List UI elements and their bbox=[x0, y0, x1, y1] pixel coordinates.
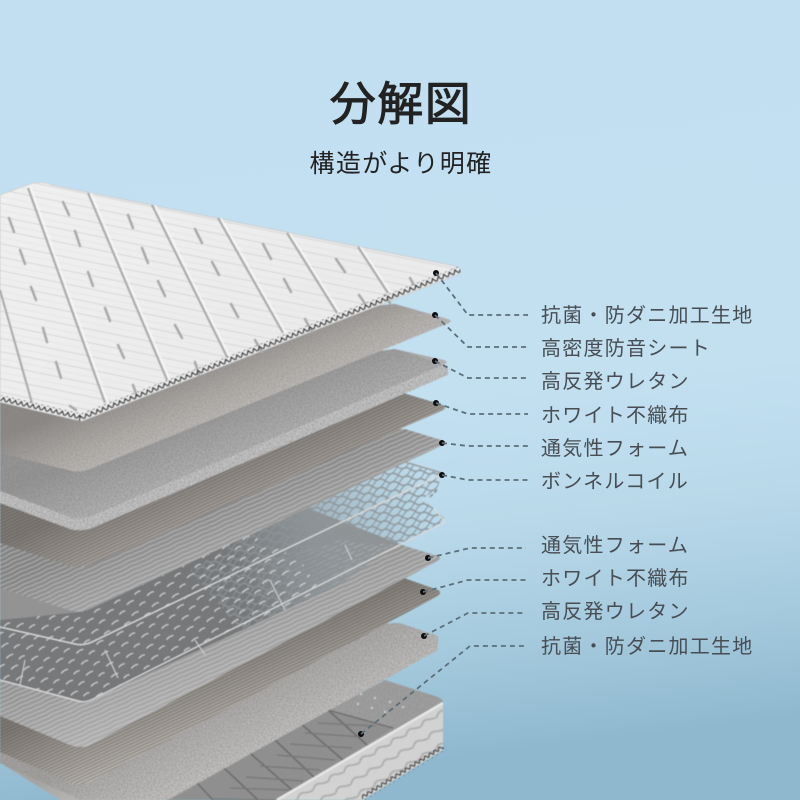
callout: 高反発ウレタン (lower): 高反発ウレタン bbox=[541, 600, 690, 623]
callout: ボンネルコイル: ボンネルコイル bbox=[541, 470, 689, 493]
callout: 抗菌・防ダニ加工生地 (top): 抗菌・防ダニ加工生地 bbox=[541, 304, 754, 327]
callout: 高密度防音シート bbox=[432, 312, 711, 360]
callout: ホワイト不織布 (lower) bbox=[420, 567, 690, 595]
layer 2 high-density soundproof sheet bbox=[0, 304, 451, 472]
callout: 通気性フォーム (lower) bbox=[425, 534, 689, 561]
callout: 通気性フォーム (lower): 通気性フォーム bbox=[541, 534, 689, 557]
callout: 抗菌・防ダニ加工生地 (bottom) bbox=[358, 635, 754, 737]
layer 1 quilted top fabric bbox=[0, 182, 461, 421]
title: 分解図 bbox=[330, 78, 472, 130]
bonnell coil bbox=[0, 462, 446, 702]
callout: 抗菌・防ダニ加工生地 (bottom): 抗菌・防ダニ加工生地 bbox=[541, 635, 754, 658]
layer 8: lower breathable foam bbox=[0, 470, 440, 747]
base mattress bbox=[160, 680, 445, 800]
callout: ボンネルコイル bbox=[439, 470, 689, 493]
callout: 高反発ウレタン bbox=[432, 358, 690, 393]
callout: 高反発ウレタン: 高反発ウレタン bbox=[541, 370, 690, 393]
callout: ホワイト不織布 (lower): ホワイト不織布 bbox=[541, 567, 690, 590]
layer 4 white non-woven fabric bbox=[0, 392, 445, 567]
callout: 高密度防音シート: 高密度防音シート bbox=[541, 337, 711, 360]
layer 9: lower high-resilience foam bbox=[0, 578, 440, 784]
callout: ホワイト不織布 bbox=[433, 400, 690, 427]
layer 6 upper breathable foam bbox=[0, 429, 443, 612]
subtitle: 構造がより明確 bbox=[309, 150, 493, 178]
callout: 高反発ウレタン (lower) bbox=[421, 600, 690, 639]
callout: 通気性フォーム bbox=[439, 437, 689, 460]
callout: 抗菌・防ダニ加工生地 (top) bbox=[433, 270, 754, 327]
callout: ホワイト不織布: ホワイト不織布 bbox=[541, 404, 690, 427]
layer 3 high-resilience foam bbox=[0, 349, 448, 530]
layer 10: lower antibacterial fabric bbox=[0, 623, 438, 800]
exploded mattress layer stack bbox=[0, 182, 461, 800]
callout: 通気性フォーム: 通気性フォーム bbox=[541, 437, 689, 460]
